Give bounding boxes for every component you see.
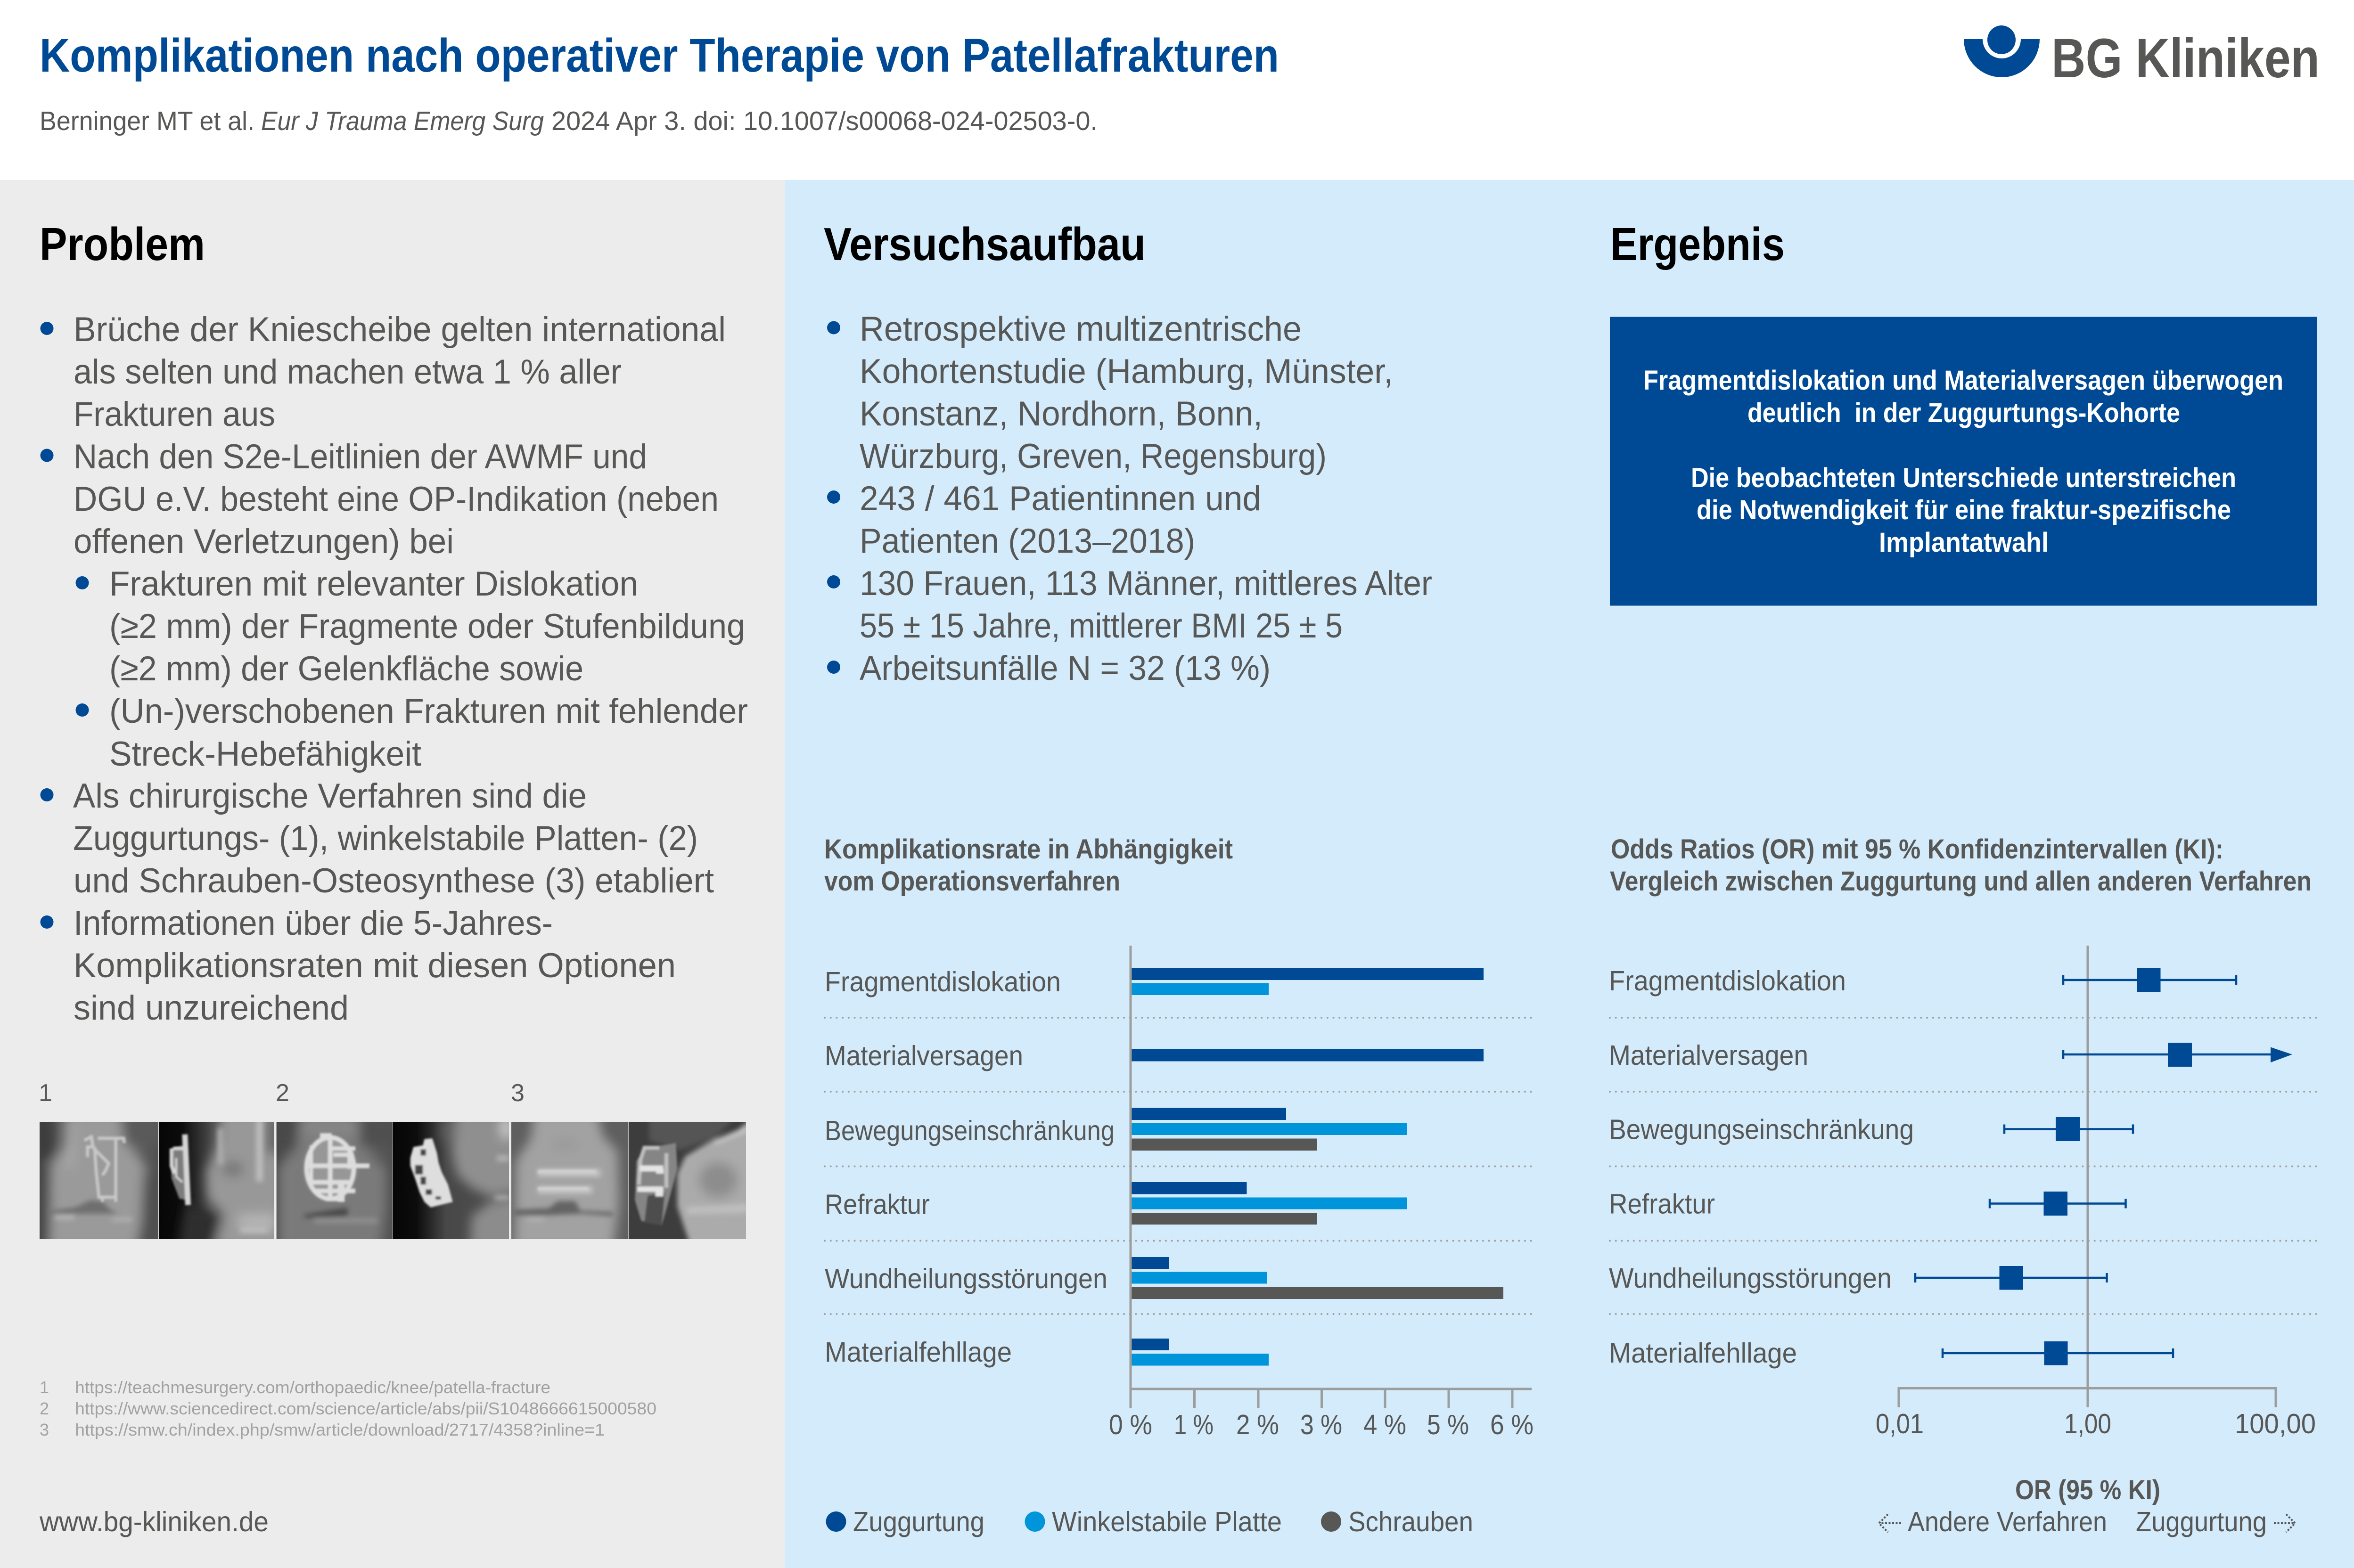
bullet list: study design: Kohortenstudie (Hamburg, Münster, bbox=[860, 352, 1393, 391]
row: Materialversagen: Materialversagen bbox=[1609, 1040, 1808, 1071]
image source footnotes: https://teachmesurgery.com/orthopaedic/knee/patella-fracture bbox=[75, 1378, 550, 1397]
bullet list: problem: als selten und machen etwa 1 % aller bbox=[74, 353, 622, 391]
row: Wundheilungsstörungen bbox=[1609, 1263, 2107, 1294]
x axis and reference line bbox=[1876, 946, 2316, 1439]
citation: 2024 Apr 3. doi: 10.1007/s00068-024-02503-0. bbox=[551, 106, 1098, 136]
bullet list: problem: und Schrauben-Osteosynthese (3) etabliert bbox=[74, 862, 714, 900]
x axis and reference line: 1,00 bbox=[2064, 1408, 2111, 1439]
bullet list: study design: Patienten (2013–2018) bbox=[860, 522, 1195, 560]
heading: Ergebnis: Ergebnis bbox=[1610, 218, 1785, 270]
image numbers 1 2 3 bbox=[39, 1079, 525, 1107]
bullet list: problem: offenen Verletzungen) bei bbox=[74, 523, 454, 561]
bullet list: problem: Als chirurgische Verfahren sind die bbox=[73, 777, 587, 815]
callout: key results: die Notwendigkeit für eine fraktur-spezifische bbox=[1697, 495, 2231, 525]
heading: Versuchsaufbau: Versuchsaufbau bbox=[824, 218, 1146, 270]
row: Materialfehllage: Materialfehllage bbox=[1609, 1338, 1797, 1369]
title: Komplikationen nach operativer Therapie von Patellafrakturen bbox=[40, 29, 1279, 82]
row: Wundheilungsstörungen: Wundheilungsstörungen bbox=[825, 1263, 1107, 1294]
axis caption: OR (95 % KI): OR (95 % KI) bbox=[2015, 1475, 2160, 1505]
bullet list: study design: 55 ± 15 Jahre, mittlerer BMI 25 ± 5 bbox=[860, 607, 1343, 645]
row: Materialfehllage bbox=[1609, 1338, 2173, 1369]
bullet list: problem: Streck-Hebefähigkeit bbox=[109, 735, 421, 773]
row: Wundheilungsstörungen: Wundheilungsstörungen bbox=[1609, 1263, 1892, 1294]
bullet list: problem bbox=[41, 310, 748, 1027]
panel: Problem bbox=[0, 180, 785, 1568]
x axis and reference line: 0,01 bbox=[1876, 1408, 1924, 1439]
legend: procedures bbox=[826, 1506, 1473, 1537]
x-ray image 3: screw osteosynthesis bbox=[511, 1122, 746, 1239]
image numbers 1 2 3: 2 bbox=[276, 1079, 289, 1107]
callout: key results: Fragmentdislokation und Materialversagen überwogen bbox=[1643, 365, 2283, 396]
bullet list: problem: (≥2 mm) der Gelenkfläche sowie bbox=[109, 650, 583, 688]
bullet list: problem: Frakturen aus bbox=[74, 395, 275, 433]
bullet list: study design: Arbeitsunfälle N = 32 (13 %) bbox=[860, 649, 1271, 687]
heading: Problem: Problem bbox=[40, 218, 205, 270]
row: Materialversagen bbox=[825, 1040, 1484, 1071]
image source footnotes: https://smw.ch/index.php/smw/article/download/2717/4358?inline=1 bbox=[75, 1420, 605, 1439]
x axis with ticks bbox=[1109, 946, 1534, 1440]
bullet list: problem: Komplikationsraten mit diesen Optionen bbox=[74, 947, 676, 985]
direction label: Andere Verfahren with dotted arrow: Andere Verfahren bbox=[1908, 1506, 2107, 1537]
legend: procedures: Zuggurtung bbox=[853, 1506, 984, 1537]
x axis with ticks: 2 % bbox=[1236, 1409, 1279, 1440]
bullet list: problem: DGU e.V. besteht eine OP-Indikation (neben bbox=[74, 480, 719, 518]
row: Materialversagen: Materialversagen bbox=[825, 1040, 1023, 1071]
x axis with ticks: 3 % bbox=[1300, 1409, 1342, 1440]
bullet list: study design: 130 Frauen, 113 Männer, mittleres Alter bbox=[860, 564, 1432, 603]
x axis with ticks: 1 % bbox=[1174, 1409, 1214, 1440]
legend: procedures: Schrauben bbox=[1348, 1506, 1473, 1537]
row: Bewegungseinschränkung bbox=[1609, 1114, 2133, 1145]
bullet list: study design: Retrospektive multizentrische bbox=[860, 310, 1302, 348]
row: Fragmentdislokation: Fragmentdislokation bbox=[825, 966, 1061, 997]
x axis with ticks: 6 % bbox=[1490, 1409, 1534, 1440]
chart heading: complication rate: Komplikationsrate in Abhängigkeit bbox=[824, 834, 1233, 865]
bullet list: study design: 243 / 461 Patientinnen und bbox=[860, 480, 1261, 518]
chart heading: complication rate bbox=[824, 834, 1233, 897]
citation: Berninger MT et al. bbox=[40, 106, 254, 136]
chart heading: complication rate: vom Operationsverfahren bbox=[824, 866, 1120, 897]
bullet list: problem: Informationen über die 5-Jahres- bbox=[74, 904, 553, 942]
bullet list: study design: Konstanz, Nordhorn, Bonn, bbox=[860, 395, 1263, 433]
logo: BG Kliniken bbox=[1964, 25, 2320, 90]
legend: procedures: Winkelstabile Platte bbox=[1052, 1506, 1282, 1537]
row: Refraktur bbox=[825, 1182, 1407, 1225]
image source footnotes bbox=[40, 1378, 656, 1439]
x axis with ticks: 0 % bbox=[1109, 1409, 1152, 1440]
bullet list: study design bbox=[827, 310, 1432, 687]
header background bbox=[0, 0, 2354, 180]
x axis and reference line: 100,00 bbox=[2235, 1408, 2316, 1439]
image numbers 1 2 3: 1 bbox=[39, 1079, 52, 1107]
x axis with ticks: 5 % bbox=[1427, 1409, 1469, 1440]
row: Wundheilungsstörungen bbox=[825, 1257, 1503, 1299]
callout: key results: Die beobachteten Unterschiede unterstreichen bbox=[1691, 463, 2236, 493]
direction label: Zuggurtung with dotted arrow: Zuggurtung bbox=[2136, 1506, 2267, 1537]
image source footnotes: https://www.sciencedirect.com/science/article/abs/pii/S1048666615000580 bbox=[75, 1399, 656, 1418]
image source footnotes: 1 bbox=[40, 1378, 49, 1397]
row: Fragmentdislokation bbox=[1609, 965, 2236, 996]
bullet list: problem: sind unzureichend bbox=[74, 989, 349, 1027]
panel: blue background bbox=[785, 180, 2354, 1568]
callout: key results bbox=[1610, 317, 2317, 606]
row: Refraktur: Refraktur bbox=[1609, 1188, 1715, 1219]
row: Bewegungseinschränkung: Bewegungseinschränkung bbox=[1609, 1114, 1914, 1145]
bullet list: problem: Nach den S2e-Leitlinien der AWMF und bbox=[74, 438, 647, 476]
x-ray image 1: tension band wiring bbox=[40, 1122, 274, 1239]
bullet list: problem: (Un-)verschobenen Frakturen mit fehlender bbox=[109, 692, 748, 730]
bullet list: problem: Zuggurtungs- (1), winkelstabile Platten- (2) bbox=[73, 819, 698, 858]
image source footnotes: 3 bbox=[40, 1420, 49, 1439]
chart heading: odds ratios: Odds Ratios (OR) mit 95 % Konfidenzintervallen (KI): bbox=[1611, 834, 2223, 865]
bullet list: study design: Würzburg, Greven, Regensburg) bbox=[860, 437, 1327, 475]
bullet list: problem: Frakturen mit relevanter Dislokation bbox=[109, 565, 638, 603]
x-ray image 2: plate osteosynthesis bbox=[276, 1122, 509, 1239]
row: Materialversagen bbox=[1609, 1040, 2292, 1071]
panel: Versuchsaufbau bbox=[824, 218, 1534, 1537]
callout: key results: Implantatwahl bbox=[1879, 527, 2049, 558]
bar chart: complication rate by procedure bbox=[825, 946, 1534, 1440]
website: www.bg-kliniken.de bbox=[39, 1506, 269, 1537]
row: Fragmentdislokation bbox=[825, 966, 1484, 997]
row: Materialfehllage: Materialfehllage bbox=[825, 1337, 1012, 1368]
row: Bewegungseinschränkung: Bewegungseinschränkung bbox=[825, 1115, 1115, 1146]
chart heading: odds ratios bbox=[1610, 834, 2312, 897]
row: Refraktur bbox=[1609, 1188, 2125, 1219]
row: Bewegungseinschränkung bbox=[825, 1108, 1407, 1151]
bullet list: problem: (≥2 mm) der Fragmente oder Stufenbildung bbox=[109, 607, 745, 645]
x axis with ticks: 4 % bbox=[1363, 1409, 1406, 1440]
forest plot: odds ratios bbox=[1609, 946, 2318, 1439]
row: Fragmentdislokation: Fragmentdislokation bbox=[1609, 965, 1846, 996]
panel: Ergebnis bbox=[1609, 218, 2318, 1537]
citation bbox=[40, 106, 1098, 136]
row: Refraktur: Refraktur bbox=[825, 1189, 930, 1220]
image numbers 1 2 3: 3 bbox=[511, 1079, 525, 1107]
citation: Eur J Trauma Emerg Surg bbox=[261, 106, 544, 136]
row: Materialfehllage bbox=[825, 1337, 1269, 1368]
callout: key results: deutlich in der Zuggurtungs-Kohorte bbox=[1747, 398, 2180, 428]
bullet list: problem: Brüche der Kniescheibe gelten international bbox=[74, 310, 726, 349]
image source footnotes: 2 bbox=[40, 1399, 49, 1418]
